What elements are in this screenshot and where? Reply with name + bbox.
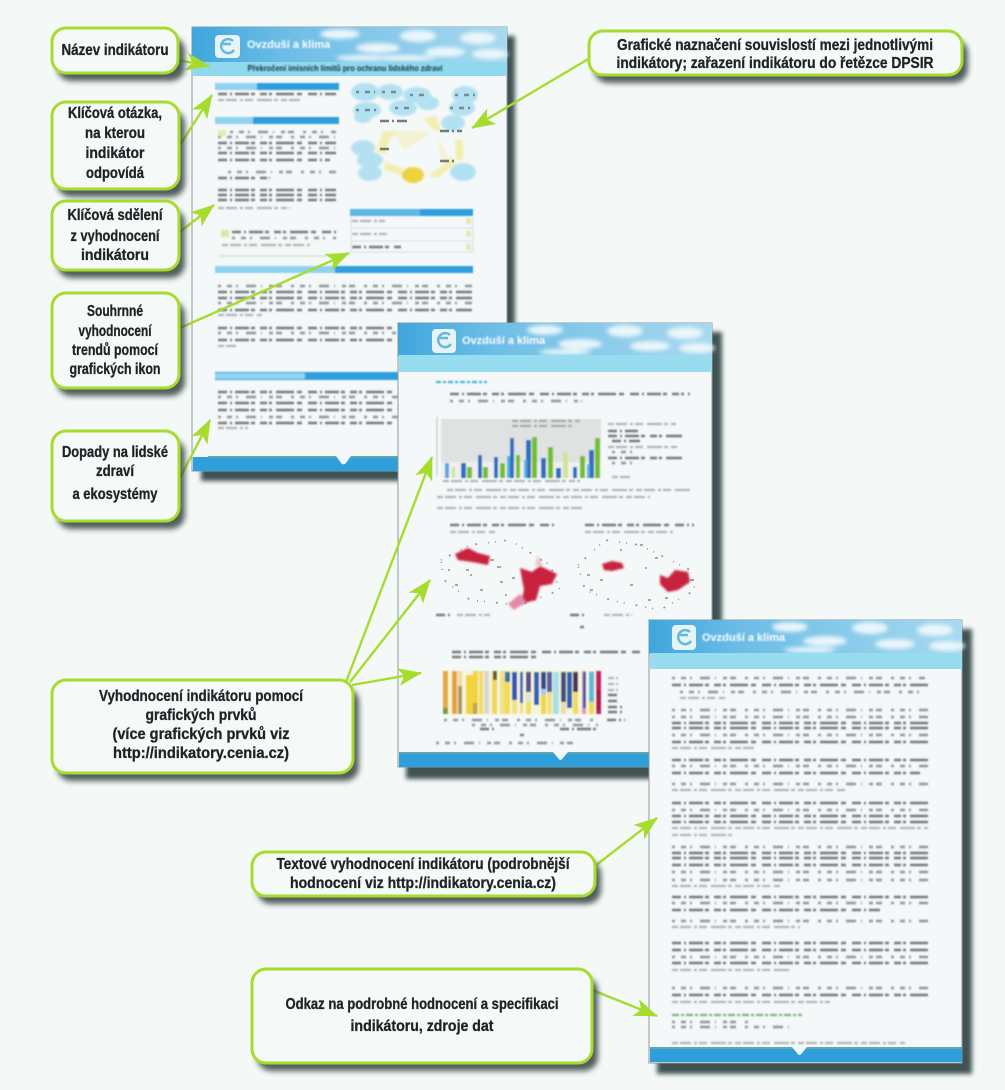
page 1 footer	[193, 456, 508, 471]
arrow: indicator name	[178, 60, 209, 66]
callout: graphical evaluation: Vyhodnocení indikátoru pomocí	[99, 688, 304, 705]
page 2 figure 3 title	[452, 652, 640, 657]
page 3 footer	[650, 1047, 962, 1062]
callout: graphical evaluation: grafických prvků	[146, 707, 256, 724]
callout: graphical evaluation: (více grafických prvků viz	[112, 726, 290, 743]
arrow: health impacts	[180, 420, 210, 478]
callout: key question: na kterou	[85, 125, 145, 142]
page 1 header: Překročení imisních limitů pro ochranu lidského zdraví	[248, 63, 443, 73]
callout: key question: Klíčová otázka,	[68, 105, 162, 122]
callout: health impacts: a ekosystémy	[72, 486, 158, 503]
page 2 section heading	[436, 381, 487, 383]
page 1 header: Ovzduší a klima	[247, 39, 331, 51]
map: exceedance left	[441, 540, 560, 610]
callout: indicator name: Název indikátoru	[62, 42, 168, 59]
arrow: key messages	[180, 205, 214, 232]
page 2 footer	[399, 752, 712, 767]
page 2 source note	[436, 742, 575, 744]
page 3 evaluation text	[672, 678, 928, 1002]
page 3 header: Ovzduší a klima	[702, 632, 786, 644]
panel: page 2 of indicator sheet	[398, 323, 722, 779]
stacked chart legend	[607, 678, 625, 720]
callout: detailed evaluation link: Odkaz na podrobné hodnocení a specifikaci	[286, 996, 558, 1013]
page 2 maps captions	[450, 525, 694, 532]
page 3 data source link	[672, 1015, 905, 1043]
map captions	[436, 615, 632, 627]
callout: key question: odpovídá	[86, 165, 144, 182]
callout: key question: indikátor	[86, 145, 144, 162]
map: exceedance right	[578, 540, 695, 610]
arrow: trend summary	[180, 253, 349, 328]
callout: health impacts: zdraví	[96, 463, 135, 480]
callout: key question	[52, 102, 185, 197]
callout: health impacts: Dopady na lidské	[62, 444, 168, 461]
callout: text evaluation: Textové vyhodnocení indikátoru (podrobnější	[276, 856, 570, 873]
page 2 figure 1 title	[450, 394, 690, 401]
callout: key messages: Klíčová sdělení	[68, 207, 163, 224]
arrow: data source link	[592, 990, 657, 1016]
callout: key messages	[52, 201, 185, 278]
panel: page 1 of indicator sheet	[192, 27, 515, 481]
callout: graphical evaluation: http://indikatory.cenia.cz)	[113, 745, 289, 762]
bar chart	[437, 417, 601, 481]
callout: relationships and DPSIR: Grafické naznačení souvislostí mezi jednotlivými	[617, 37, 933, 54]
callout: trend summary: Souhrnné	[87, 303, 143, 320]
page 1 summary trend table	[350, 209, 473, 252]
page 1 section: evaluation summary	[215, 266, 473, 346]
arrow: stacked chart	[352, 673, 421, 685]
callout: text evaluation	[252, 852, 601, 904]
page 2 header: Ovzduší a klima	[462, 335, 546, 347]
callout: relationships and DPSIR	[589, 31, 968, 83]
callout: detailed evaluation link: indikátoru, zdroje dat	[350, 1018, 494, 1035]
panel: page 3 of indicator sheet	[649, 620, 972, 1074]
callout: key messages: indikátoru	[81, 247, 149, 264]
page 3 header	[649, 620, 965, 669]
callout: trend summary: vyhodnocení	[78, 323, 152, 340]
page 1 diagram: indicator relationships	[351, 83, 478, 183]
callout: detailed evaluation link	[252, 969, 598, 1071]
page 1 section: health impacts	[215, 372, 400, 428]
callout: text evaluation: hodnocení viz http://indikatory.cenia.cz)	[290, 875, 556, 892]
callout: key messages: z vyhodnocení	[70, 228, 160, 245]
arrow: relationships diagram	[472, 58, 590, 128]
chart legend	[608, 424, 682, 477]
arrow: bar chart	[346, 457, 432, 682]
callout: trend summary: trendů pomocí	[72, 342, 159, 359]
callout: trend summary	[52, 293, 185, 396]
callout: relationships and DPSIR: indikátory; zařazení indikátoru do řetězce DPSIR	[616, 55, 934, 72]
callout: graphical evaluation	[52, 680, 359, 781]
page 1 header	[192, 27, 508, 76]
callout: health impacts	[52, 431, 185, 529]
arrow: text evaluation	[595, 818, 657, 866]
page 2 figure 1 notes	[437, 490, 692, 508]
page 2 header	[398, 323, 715, 372]
callout: trend summary: grafických ikon	[70, 361, 160, 378]
stacked bar chart	[443, 671, 601, 735]
arrow: maps	[350, 580, 430, 682]
callout: indicator name	[52, 28, 185, 81]
arrow: key question	[180, 95, 212, 145]
page 1 section: key question	[215, 83, 339, 100]
page 1 section: key messages	[215, 117, 339, 256]
